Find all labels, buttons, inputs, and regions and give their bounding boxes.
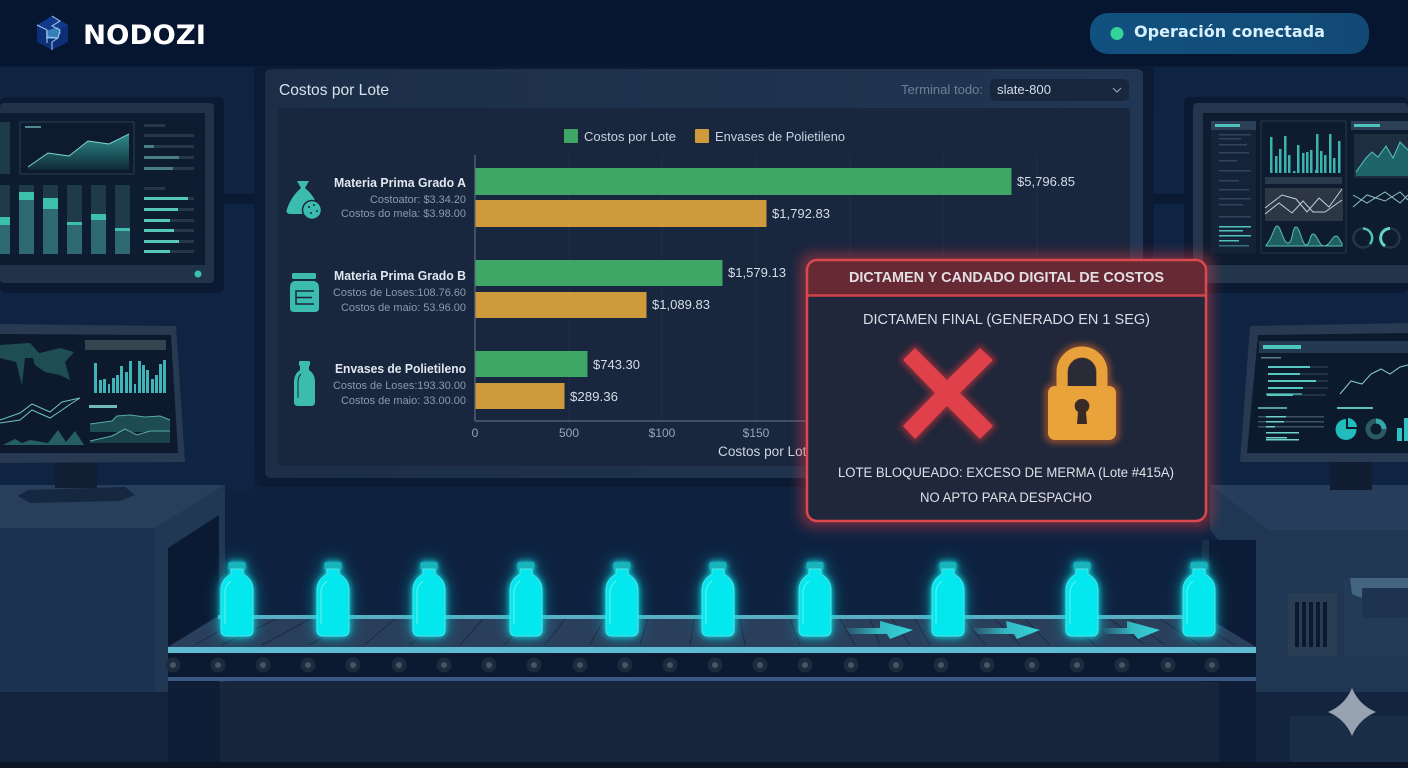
- bar chart: $5,796.85: [1017, 174, 1075, 189]
- right lower monitor: [1240, 323, 1408, 490]
- row labels: Materia Prima Grado B: [333, 269, 466, 314]
- status text: Operación conectada: [1134, 22, 1325, 41]
- conveyor belt: [0, 615, 1408, 768]
- bar chart: [472, 155, 1120, 459]
- machine hatch: [1344, 578, 1408, 656]
- bar chart: $1,792.83: [772, 206, 830, 221]
- row labels: Materia Prima Grado A: Costoator: $3.34.20: [370, 194, 466, 206]
- bottle 4: [510, 562, 542, 636]
- sparkle watermark: [1328, 688, 1376, 736]
- main dashboard frame: [255, 66, 1153, 487]
- brand name: NODOZI: [83, 20, 206, 51]
- bottle 9: [1066, 562, 1098, 636]
- icon: red X: [903, 348, 993, 439]
- right machine: [1202, 485, 1408, 762]
- logo: cube icon: [37, 16, 68, 50]
- bar chart: $743.30: [593, 357, 640, 372]
- bottle 10: [1183, 562, 1215, 636]
- row labels: Materia Prima Grado B: Costos de Loses:108.76.60: [333, 287, 466, 299]
- row labels: Envases de Polietileno: [333, 362, 466, 407]
- icon: jar: [290, 273, 319, 312]
- bottle 7: [799, 562, 831, 636]
- verdict subheading: DICTAMEN FINAL (GENERADO EN 1 SEG): [863, 311, 1150, 328]
- row labels: Envases de Polietileno: Costos de maio: 33.00.00: [341, 395, 466, 407]
- arrow 2: [972, 621, 1040, 639]
- row labels: Materia Prima Grado A: Materia Prima Grado A: [334, 176, 466, 190]
- bar chart: $150: [743, 426, 770, 440]
- arrow 1: [845, 621, 913, 639]
- left lower monitor: [0, 324, 185, 503]
- chart legend: Envases de Polietileno: [715, 129, 845, 144]
- chart legend: Costos por Lote: [584, 129, 676, 144]
- bar chart: 0: [472, 426, 479, 440]
- bottle 1: [221, 562, 253, 636]
- bar chart: $100: [649, 426, 676, 440]
- terminal selector: slate-800: [997, 82, 1051, 97]
- bottle 6: [702, 562, 734, 636]
- terminal selector: Terminal todo:: [901, 83, 983, 97]
- status dot: [1110, 27, 1124, 40]
- row labels: Materia Prima Grado B: Costos de maio: 53.96.00: [341, 302, 466, 314]
- row labels: Envases de Polietileno: Costos de Loses:193.30.00: [333, 380, 466, 392]
- row labels: Materia Prima Grado A: [334, 176, 466, 220]
- bar chart: $1,579.13: [728, 265, 786, 280]
- icon: sack with ball: [286, 181, 322, 220]
- bar chart: 500: [559, 426, 579, 440]
- icon: padlock: [1048, 347, 1116, 440]
- right upper monitor: [1184, 97, 1408, 293]
- row labels: Envases de Polietileno: Envases de Polietileno: [335, 362, 466, 376]
- panel heading: Costos por Lote: [279, 82, 389, 99]
- header band: [0, 0, 1408, 66]
- bottle 3: [413, 562, 445, 636]
- bar chart: $1,089.83: [652, 297, 710, 312]
- vent grille: [1288, 593, 1337, 656]
- left machine table: [0, 485, 225, 762]
- dispatch message: NO APTO PARA DESPACHO: [920, 490, 1092, 505]
- panel: costos por lote: [265, 69, 1143, 478]
- bottle 2: [317, 562, 349, 636]
- terminal selector: [901, 79, 1129, 101]
- arrow 3: [1102, 621, 1160, 639]
- callout: dictamen: [800, 253, 1213, 528]
- status pill: [1090, 13, 1369, 54]
- conveyor rollers: [166, 658, 1220, 672]
- bottle 5: [606, 562, 638, 636]
- row labels: Materia Prima Grado A: Costos do mela: $3.98.00: [341, 208, 466, 220]
- bar chart: $289.36: [570, 389, 618, 404]
- wall panels: [0, 67, 1408, 610]
- bottle 8: [932, 562, 964, 636]
- callout heading: DICTAMEN Y CANDADO DIGITAL DE COSTOS: [849, 269, 1164, 286]
- left upper monitor: [0, 97, 224, 293]
- icon: bottle: [294, 361, 315, 406]
- row labels: Materia Prima Grado B: Materia Prima Grado B: [334, 269, 466, 283]
- block message: LOTE BLOQUEADO: EXCESO DE MERMA (Lote #415A): [838, 465, 1174, 480]
- chart legend: [564, 129, 845, 144]
- bar chart: Costos por Lote: [718, 444, 814, 459]
